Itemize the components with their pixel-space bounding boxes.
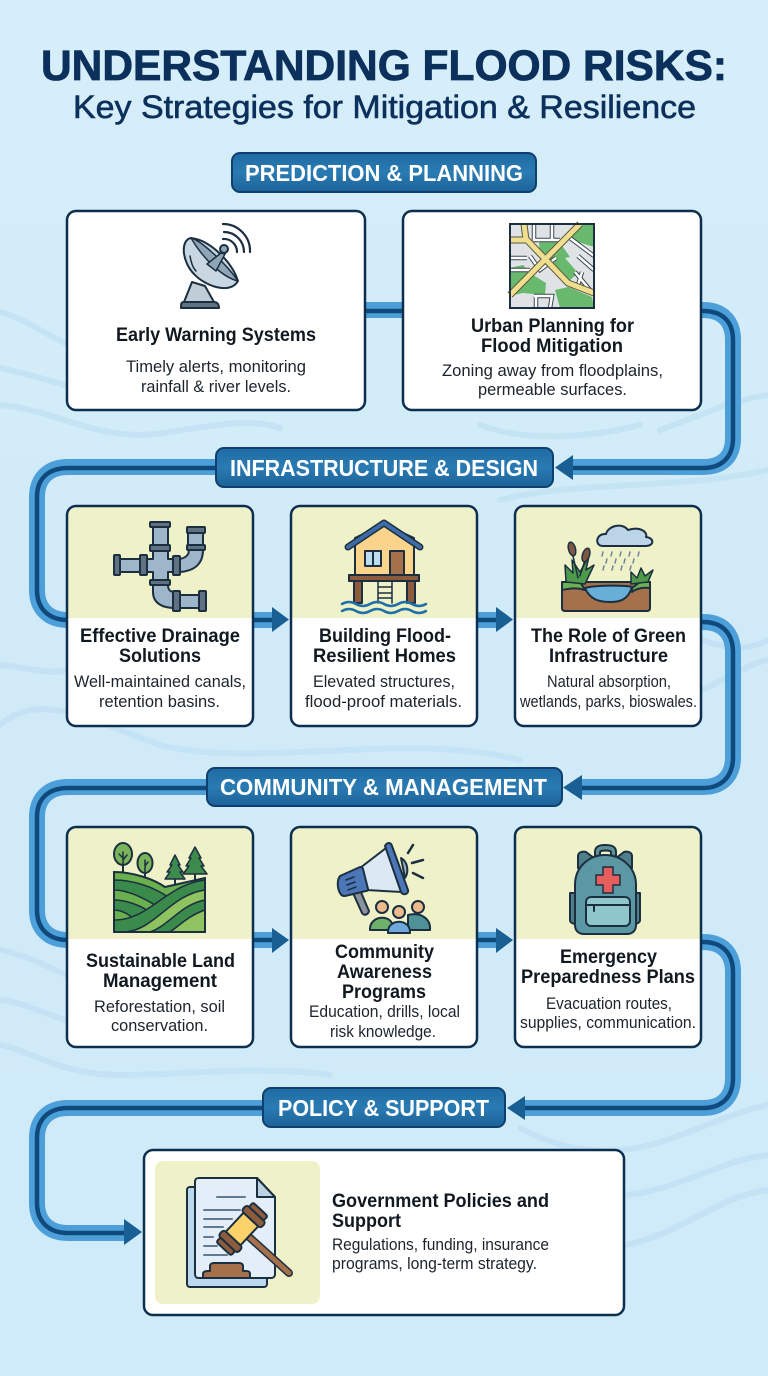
heading: Support (332, 1210, 401, 1232)
text (126, 357, 306, 396)
heading: Early Warning Systems (116, 324, 316, 346)
text: Regulations, funding, insurance (332, 1235, 549, 1254)
section pill: Prediction & Planning (232, 153, 536, 192)
heading: Resilient Homes (313, 645, 456, 667)
heading: Awareness (337, 961, 432, 983)
text: rainfall & river levels. (141, 377, 291, 396)
section pill: Infrastructure & Design (216, 448, 553, 487)
icon: document and gavel (187, 1178, 289, 1287)
text: Natural absorption, (547, 672, 671, 691)
text: wetlands, parks, bioswales. (519, 692, 697, 711)
text (332, 1235, 549, 1273)
text: Zoning away from floodplains, (442, 361, 663, 380)
text: Well-maintained canals, (74, 672, 246, 691)
icon: megaphone and people (338, 843, 430, 933)
heading (332, 1190, 549, 1232)
text (94, 997, 225, 1035)
heading: Emergency (560, 946, 657, 968)
text: flood-proof materials. (305, 692, 462, 711)
heading (86, 950, 235, 992)
text: Reforestation, soil (94, 997, 225, 1016)
text: programs, long-term strategy. (332, 1254, 537, 1273)
text (305, 672, 462, 711)
text: Timely alerts, monitoring (126, 357, 306, 376)
arrowheads (124, 455, 582, 1245)
panel: Urban Planning (403, 211, 701, 410)
icon: emergency backpack (570, 845, 640, 934)
heading (531, 625, 686, 667)
panel: Community Awareness (291, 827, 477, 1047)
icon: house on stilts (342, 523, 426, 613)
heading: Effective Drainage (80, 625, 240, 647)
flow connector path (37, 310, 733, 1233)
heading: Sustainable Land (86, 950, 235, 972)
text: Education, drills, local (309, 1002, 460, 1021)
heading (471, 315, 634, 357)
heading: Flood Mitigation (481, 335, 623, 357)
text: conservation. (111, 1016, 208, 1035)
section pill: Community & Management: COMMUNITY & MANAGEMENT (220, 774, 548, 800)
subtitle: Key Strategies for Mitigation & Resilience (73, 89, 696, 125)
panel: Effective Drainage (67, 506, 253, 726)
heading: Urban Planning for (471, 315, 634, 337)
heading: Building Flood- (319, 625, 451, 647)
heading: Solutions (119, 645, 201, 667)
text (520, 994, 696, 1032)
section pill: Policy & Support (263, 1088, 505, 1127)
text: retention basins. (99, 692, 220, 711)
text: Evacuation routes, (546, 994, 672, 1013)
heading: Preparedness Plans (521, 966, 695, 988)
heading: Management (103, 970, 217, 992)
icon: hills and trees (114, 843, 207, 932)
icon: city map (509, 224, 594, 308)
heading (80, 625, 240, 667)
heading (521, 946, 695, 988)
heading (313, 625, 456, 667)
heading (335, 941, 434, 1003)
title: UNDERSTANDING FLOOD RISKS: (41, 43, 727, 90)
text: supplies, communication. (520, 1013, 696, 1032)
panel: Early Warning Systems (67, 211, 365, 410)
panel: Green Infrastructure (515, 506, 701, 726)
section pill: Community & Management (207, 768, 562, 806)
text (442, 361, 663, 399)
text (74, 672, 246, 711)
icon: wetland with rain cloud (562, 526, 653, 611)
section pill: Prediction & Planning: PREDICTION & PLANNING (245, 160, 523, 186)
heading: Community (335, 941, 434, 963)
text: Elevated structures, (313, 672, 455, 691)
section pill: Infrastructure & Design: INFRASTRUCTURE & DESIGN (230, 455, 538, 481)
heading: Infrastructure (549, 645, 668, 667)
heading: The Role of Green (531, 625, 686, 647)
section pill: Policy & Support: POLICY & SUPPORT (278, 1095, 490, 1121)
heading: Government Policies and (332, 1190, 549, 1212)
text (519, 672, 697, 711)
icon: drainage pipes (114, 522, 206, 611)
text: permeable surfaces. (478, 380, 627, 399)
heading: Programs (342, 981, 426, 1003)
text (309, 1002, 460, 1041)
panel: Emergency Preparedness (515, 827, 701, 1047)
text: risk knowledge. (330, 1022, 436, 1041)
panel: Sustainable Land Management (67, 827, 253, 1047)
icon: satellite dish (181, 224, 250, 308)
panel: Government Policies (144, 1150, 624, 1315)
panel: Flood-Resilient Homes (291, 506, 477, 726)
